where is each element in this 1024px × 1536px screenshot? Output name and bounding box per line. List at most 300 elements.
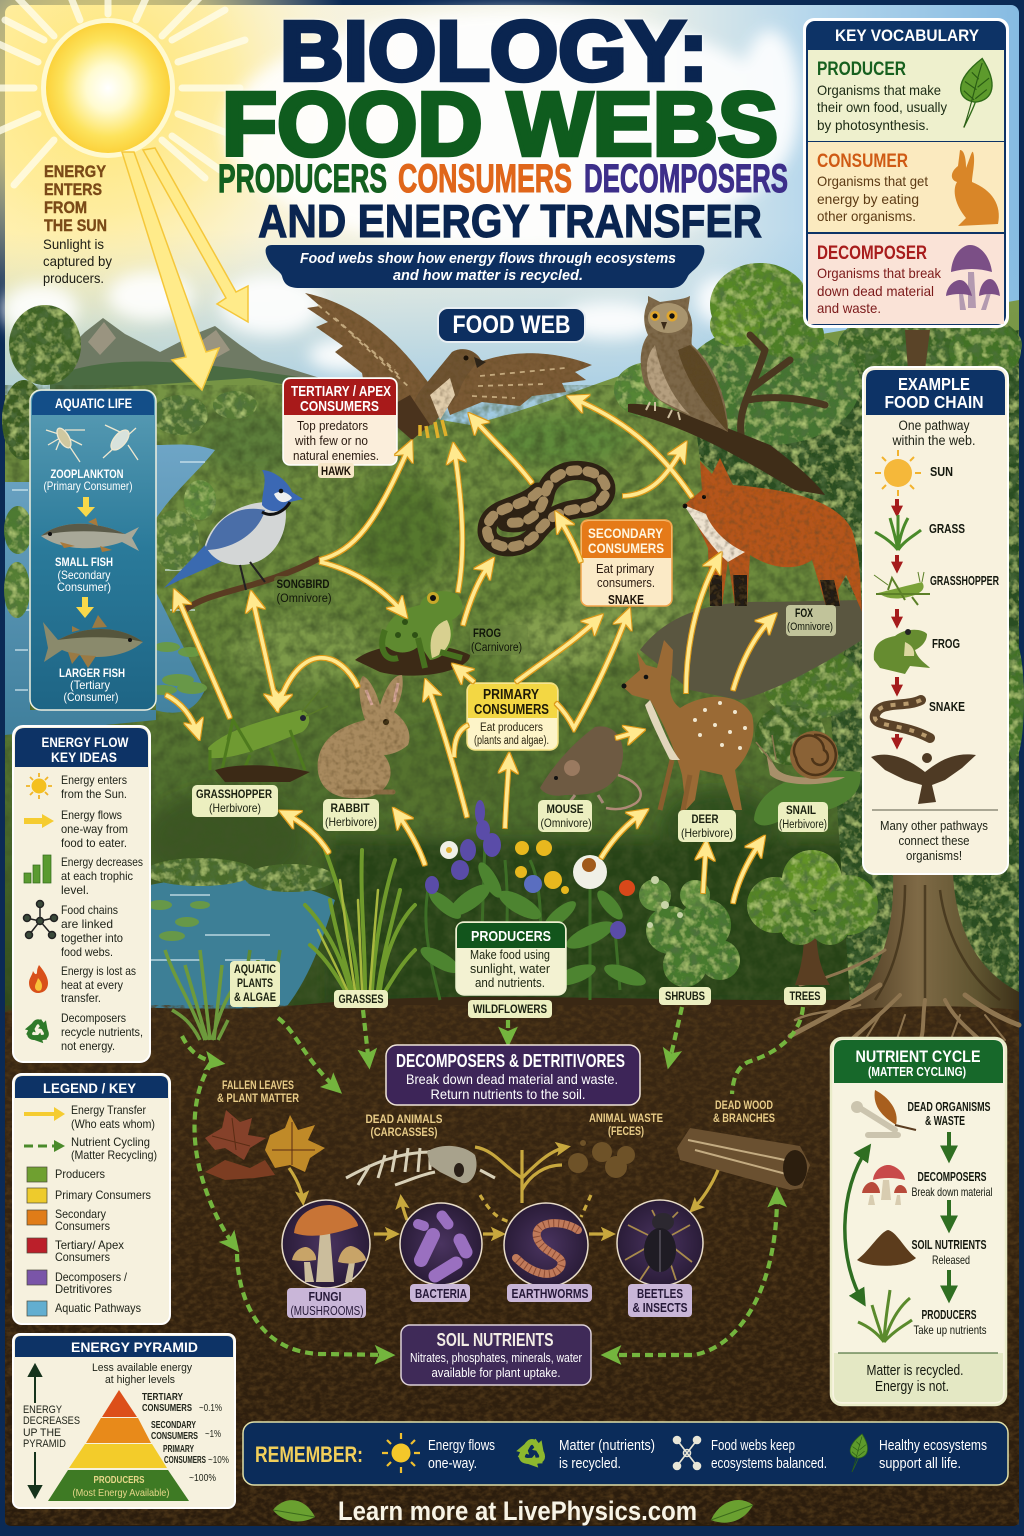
animal: songbird on branch (164, 470, 320, 610)
arrow: fungi to bacteria (374, 1232, 396, 1236)
arrow: fork to earthworm (475, 1147, 567, 1203)
label: aquatic plants and algae: AQUATIC (234, 962, 276, 976)
vocabulary: producer: their own food, usually (817, 99, 947, 115)
arrow: aquatic plants to leaves (278, 1018, 338, 1090)
panel: energy flow key ideas: are linked (61, 917, 113, 931)
subtitle banner: and how matter is recycled. (393, 267, 583, 284)
panel: legend key: Aquatic Pathways (55, 1301, 141, 1315)
label: mouse (538, 800, 592, 832)
pyramid levels: (Most Energy Available) (72, 1487, 170, 1499)
panel: example food chain: FOOD CHAIN (884, 392, 984, 412)
decomposer: fungi (282, 1200, 370, 1288)
icon: leaf (850, 1434, 867, 1472)
label: snail (778, 802, 828, 832)
panel: nutrient cycle (831, 1038, 1006, 1405)
panel: legend key: (Who eats whom) (71, 1117, 155, 1131)
text: healthy ecosystems support all life: support all life. (879, 1455, 961, 1472)
icon: recycle (24, 1020, 52, 1045)
pyramid labels: ~10% (208, 1454, 229, 1466)
labels: decomposition inputs (217, 1078, 775, 1139)
nutrient cycle labels: Take up nutrients (914, 1323, 986, 1337)
label: grasses: GRASSES (338, 992, 384, 1006)
text: matter is recycled: Matter (nutrients) (559, 1437, 655, 1454)
label: aquatic plants and algae: & ALGAE (234, 990, 276, 1004)
arrow: waste dashed to earthworm (581, 1195, 591, 1217)
panel: soil nutrients (401, 1325, 591, 1385)
vocabulary: consumer: energy by eating (817, 191, 919, 207)
icon: dead organisms (851, 1090, 916, 1135)
label: beetles and insects (628, 1284, 692, 1317)
arrow: soil nutrients to producers (947, 1270, 951, 1298)
icon: flame (29, 965, 48, 993)
panel: aquatic life: LARGER FISH (59, 666, 125, 680)
panel: example food chain: organisms! (906, 848, 962, 863)
panel: energy pyramid: DECREASES (23, 1415, 80, 1427)
pyramid labels: PRIMARY (163, 1444, 194, 1455)
arrow: cycle return (845, 1148, 868, 1302)
title: BIOLOGY: (280, 4, 708, 98)
arrow: dead organisms to decomposers (947, 1132, 951, 1158)
decomposer: beetles (617, 1200, 703, 1286)
panel: primary consumers (467, 683, 558, 750)
arrow: snake to hawk (895, 734, 899, 746)
pyramid labels: CONSUMERS (142, 1403, 192, 1414)
panel: legend key: Detritivores (55, 1282, 112, 1296)
arrow: deer to fox (686, 557, 719, 693)
arrow: mouse to secondary (556, 613, 628, 728)
animal: owl on branch and perch tree (628, 296, 825, 495)
arrow: wildflowers to decomposers (506, 1020, 510, 1042)
panel: example food chain: connect these (898, 833, 970, 848)
label: rabbit (323, 799, 379, 831)
panel: tertiary apex consumers: with few or no (294, 433, 368, 448)
arrow: songbird and grasshopper link (252, 596, 277, 707)
nutrient cycle labels (908, 1099, 992, 1337)
text: food webs keep ecosystems balanced (711, 1437, 827, 1472)
footer note (834, 1353, 1003, 1402)
panel: energy flow key ideas: at each trophic (61, 869, 133, 883)
panel: energy flow key ideas: Decomposers (61, 1011, 126, 1025)
panel: secondary consumers: SNAKE (608, 592, 644, 607)
animal: fox (683, 458, 862, 612)
label: aquatic plants and algae (230, 961, 280, 1007)
animal: rabbit (318, 675, 409, 798)
labels: decomposition inputs: (FECES) (608, 1124, 644, 1138)
panel: tertiary apex consumers: natural enemies. (293, 448, 379, 463)
scene: broad foliage colour (145, 405, 860, 1005)
panel: energy flow key ideas: food to eater. (61, 836, 127, 850)
panel: energy pyramid: PYRAMID (23, 1438, 66, 1450)
panel: producers: and nutrients. (475, 976, 545, 990)
panel: decomposers and detritivores: Return nutrients to the soil. (430, 1086, 586, 1102)
panel: primary consumers: PRIMARY (483, 687, 539, 703)
panel: secondary consumers: SECONDARY (588, 525, 664, 541)
panel: remember bar (243, 1422, 1008, 1485)
chain: snake: SNAKE (929, 699, 965, 714)
panel: producers (456, 922, 566, 995)
label: mouse: MOUSE (546, 802, 584, 816)
panel: energy flow key ideas: from the Sun. (61, 787, 127, 801)
labels: decomposition inputs: DEAD WOOD (715, 1098, 773, 1112)
pyramid labels: CONSUMERS (164, 1455, 206, 1466)
panel: primary consumers: Eat producers (480, 722, 543, 734)
arrow: grass to grasshopper (895, 555, 899, 570)
footer note: Matter is recycled. (866, 1363, 964, 1379)
text: healthy ecosystems support all life: Healthy ecosystems (879, 1437, 987, 1454)
icon: decreasing energy bars (24, 855, 51, 883)
panel: aquatic life: AQUATIC LIFE (55, 396, 132, 411)
arrow: fungi side to soil nutrients (237, 1254, 390, 1355)
label: rabbit: (Herbivore) (325, 815, 377, 829)
panel: aquatic life: SMALL FISH (55, 555, 113, 569)
arrow: wildflowers to mouse (601, 812, 644, 858)
chain: sun: SUN (930, 464, 953, 479)
icon: small fish (41, 518, 139, 552)
panel: secondary consumers: consumers. (597, 576, 655, 590)
pyramid labels: ~100% (189, 1472, 216, 1484)
panel: energy flow key ideas: Energy flows (61, 808, 122, 822)
label: trees (784, 987, 826, 1005)
panel: aquatic life (30, 390, 156, 710)
nutrient cycle labels: SOIL NUTRIENTS (912, 1237, 987, 1252)
chain: frog (874, 629, 960, 674)
arrow: short curve to primary box (454, 725, 468, 757)
text block: energy enters from the sun: producers. (43, 270, 104, 286)
panel: legend key: Consumers (55, 1250, 110, 1264)
labels: decomposition inputs: & PLANT MATTER (217, 1091, 299, 1105)
text block: energy enters from the sun: ENERGY (44, 162, 107, 181)
panel: energy flow key ideas: not energy. (61, 1039, 115, 1053)
panel: aquatic life: Consumer) (57, 580, 111, 594)
panel: energy flow key ideas: level. (61, 883, 89, 897)
text: matter is recycled: is recycled. (559, 1455, 621, 1472)
label: beetles and insects: BEETLES (637, 1286, 683, 1301)
panel: example food chain: One pathway (898, 418, 970, 433)
arrow: wildflowers to primary consumers (505, 758, 509, 828)
labels: decomposition inputs: DEAD ANIMALS (366, 1112, 442, 1126)
panel: energy flow key ideas: Energy decreases (61, 855, 143, 869)
label: wildflowers (468, 1000, 552, 1018)
nutrient cycling arrows (182, 1007, 803, 1355)
label: deer: DEER (692, 812, 719, 826)
label: fox: (Omnivore) (787, 621, 833, 633)
icon: dead log (677, 1128, 810, 1190)
pyramid levels: PRODUCERS (94, 1474, 144, 1486)
label: trees: TREES (790, 989, 820, 1003)
panel: nutrient cycle: NUTRIENT CYCLE (856, 1047, 980, 1066)
panel: legend key: Decomposers / (55, 1270, 128, 1284)
arrow: bacteria to carcass (401, 1198, 407, 1220)
decomposer: earthworms (504, 1203, 588, 1287)
arrow: pyramid up (29, 1365, 41, 1403)
panel: energy flow key ideas: one-way from (61, 822, 128, 836)
panel: example food chain: within the web. (892, 433, 976, 448)
panel: energy flow key ideas: heat at every (61, 978, 123, 992)
panel: legend key: (Matter Recycling) (71, 1148, 157, 1162)
animal: mouse (540, 726, 641, 809)
label: grasshopper (192, 785, 278, 817)
animal: hawk (305, 293, 592, 440)
arrow: pyramid down (29, 1452, 41, 1497)
legend: nutrient cycling arrow (24, 1140, 65, 1152)
panel: soil nutrients: available for plant uptake. (432, 1365, 560, 1380)
icon: sun (382, 1433, 420, 1473)
scene: big tree trunk and roots (790, 872, 1019, 1045)
label: fox: FOX (795, 608, 813, 620)
panel: energy pyramid: Less available energy (92, 1362, 192, 1374)
arrow: wildflowers to rabbit side (427, 684, 467, 817)
animal: grasshopper (208, 690, 328, 782)
label: grasses (334, 990, 388, 1008)
scene: soil underground (5, 995, 1019, 1526)
pyramid levels (48, 1390, 189, 1501)
panel: tertiary apex consumers (283, 378, 397, 478)
arrow: songbird to frog (320, 562, 404, 614)
panel: legend key (13, 1074, 170, 1324)
text block: energy enters from the sun: THE SUN (44, 216, 107, 235)
nutrient cycle labels: PRODUCERS (922, 1307, 977, 1322)
arrow: shrubs to deer (703, 845, 706, 893)
arrow: frog to hawk (454, 448, 462, 592)
chain: hawk (871, 753, 976, 804)
arrow: grasses to decomposers (363, 1010, 369, 1064)
panel: energy pyramid: at higher levels (105, 1374, 175, 1386)
panel: primary consumers: (plants and algae). (474, 735, 549, 747)
animal: deer (622, 640, 754, 815)
chain: grass (875, 515, 965, 550)
arrow: secondary consumers to snake (558, 516, 581, 562)
vocabulary: decomposer: down dead material (817, 283, 934, 299)
arrow: frog to snake (895, 677, 899, 693)
pyramid labels: ~0.1% (199, 1402, 222, 1414)
vocabulary: producer: by photosynthesis. (817, 117, 929, 133)
arrow: snake to hawk (472, 417, 532, 483)
label: shrubs (659, 987, 711, 1005)
label: earthworms: EARTHWORMS (512, 1286, 589, 1301)
arrow: frog to snake (463, 562, 491, 625)
arrow: shrubs to decomposers (669, 1007, 682, 1064)
panel: secondary consumers (581, 520, 672, 607)
arrow: zooplankton to small fish (77, 497, 95, 517)
icon: footer leaf left (273, 1500, 315, 1521)
arrow: fox to hawk (572, 398, 692, 497)
panel: legend key: Secondary (55, 1207, 106, 1221)
animal: frog (355, 591, 470, 676)
pyramid labels (142, 1392, 229, 1484)
label: rabbit: RABBIT (330, 801, 370, 815)
panel: energy flow key ideas: Energy enters (61, 773, 127, 787)
text: energy flows one-way: one-way. (428, 1455, 477, 1472)
panel: producers: Make food using (470, 948, 550, 962)
label: grasshopper: GRASSHOPPER (196, 787, 272, 801)
label: songbird: (Omnivore) (276, 593, 332, 605)
nutrient cycle labels: DECOMPOSERS (918, 1169, 987, 1184)
title: FOOD WEBS (222, 75, 778, 175)
panel: decomposers and detritivores (386, 1045, 640, 1105)
vocabulary: decomposer: DECOMPOSER (817, 243, 927, 264)
label: songbird: SONGBIRD (276, 579, 330, 591)
scene: soil texture (5, 1005, 1019, 1525)
animal: snake (487, 470, 606, 547)
legend: energy transfer arrow (24, 1107, 65, 1121)
panel: energy flow key ideas: together into (61, 931, 123, 945)
panel: energy pyramid: ENERGY PYRAMID (71, 1339, 198, 1355)
panel: legend key: Energy Transfer (71, 1103, 146, 1117)
panel: energy flow key ideas: Energy is lost as (61, 964, 136, 978)
nutrient cycle labels: & WASTE (925, 1113, 965, 1128)
pyramid labels: SECONDARY (151, 1420, 196, 1431)
label: earthworms (507, 1284, 592, 1302)
panel: secondary consumers: Eat primary (596, 562, 655, 576)
icon: mushrooms (862, 1165, 907, 1205)
arrow: grasshopper to songbird (176, 594, 230, 718)
label: wildflowers: WILDFLOWERS (473, 1002, 547, 1016)
arrow: down to fungi (195, 1063, 236, 1248)
arrow: decomposers to soil nutrients (947, 1200, 951, 1228)
label: fungi: (MUSHROOMS) (290, 1303, 364, 1318)
panel: legend key: LEGEND / KEY (43, 1081, 136, 1096)
panel: key vocabulary: KEY VOCABULARY (835, 26, 980, 45)
vocabulary: consumer: Organisms that get (817, 173, 928, 189)
panel: tertiary apex consumers: HAWK (321, 464, 351, 478)
panel: tertiary apex consumers: TERTIARY / APEX (291, 383, 391, 400)
panel: nutrient cycle: (MATTER CYCLING) (868, 1065, 966, 1079)
scene: meadow ground (5, 300, 1019, 1030)
scene: sky with sun glow and clouds (0, 0, 1019, 445)
label: deer: (Herbivore) (681, 826, 733, 840)
panel: tertiary apex consumers: CONSUMERS (300, 398, 379, 415)
panel: energy flow key ideas (13, 726, 150, 1062)
arrow: grasses to rabbit (396, 812, 425, 865)
nutrient cycle labels: Break down material (912, 1185, 992, 1199)
icon: fallen leaves (205, 1110, 325, 1180)
sun rays: energy arrows (122, 148, 248, 390)
title (218, 4, 788, 247)
icon: network (674, 1436, 700, 1470)
text block: energy enters from the sun: FROM (44, 198, 87, 217)
text: healthy ecosystems support all life (879, 1437, 987, 1472)
label: shrubs: SHRUBS (665, 989, 705, 1003)
text: matter is recycled (559, 1437, 655, 1472)
panel: energy pyramid (13, 1334, 235, 1508)
panel: energy flow key ideas: KEY IDEAS (51, 750, 117, 765)
label: fungi: FUNGI (308, 1289, 342, 1304)
vocabulary: decomposer (808, 234, 1004, 324)
labels: decomposition inputs: ANIMAL WASTE (589, 1111, 663, 1125)
chain: grasshopper (874, 572, 999, 605)
panel: example food chain (863, 367, 1008, 874)
plants: tree (747, 850, 878, 985)
arrow: rabbit to songbird branch curve (278, 658, 358, 706)
footer: learn more: Learn more at LivePhysics.com (338, 1496, 697, 1526)
chain: grass: GRASS (929, 521, 965, 536)
text: energy flows one-way: Energy flows (428, 1437, 495, 1454)
arrow: dead wood to beetles (692, 1170, 718, 1210)
label: bacteria (410, 1284, 470, 1302)
animal: fox rock ledge (640, 600, 862, 700)
arrow: sun to grass (895, 499, 899, 514)
panel: legend key: Consumers (55, 1219, 110, 1233)
panel: energy flow key ideas: transfer. (61, 991, 101, 1005)
vocabulary: consumer (808, 142, 1004, 232)
title: AND ENERGY TRANSFER (258, 195, 762, 247)
panel: producers: sunlight, water (470, 962, 550, 976)
legend: colour swatches (27, 1167, 47, 1316)
heading: food web: FOOD WEB (452, 311, 570, 339)
label: snail: SNAIL (786, 803, 816, 817)
label: bacteria: BACTERIA (415, 1286, 467, 1301)
vocabulary: consumer: CONSUMER (817, 151, 908, 172)
arrow: small fish to larger fish (76, 597, 94, 618)
label: snail: (Herbivore) (779, 819, 827, 831)
panel: legend key: Nutrient Cycling (71, 1135, 150, 1149)
icon: zooplankton (46, 425, 138, 462)
labels: decomposition inputs: (CARCASSES) (370, 1125, 438, 1139)
scene: forest and tree canopies (2, 263, 1024, 1000)
icon: food chain network (24, 900, 58, 938)
chain: sun (875, 450, 953, 496)
vocabulary: consumer: other organisms. (817, 208, 916, 224)
panel: soil nutrients: SOIL NUTRIENTS (436, 1330, 554, 1350)
arrow: primary consumers to frog (456, 667, 474, 682)
animal: snail (754, 731, 860, 825)
vocabulary: producer: Organisms that make (817, 82, 941, 98)
scene: foliage texture (5, 385, 1019, 1010)
panel: decomposers and detritivores: Break down dead material and waste. (406, 1071, 618, 1087)
text: energy flows one-way (428, 1437, 495, 1472)
pyramid labels: ~1% (205, 1428, 221, 1440)
pyramid labels: TERTIARY (142, 1392, 183, 1403)
panel: aquatic life: (Consumer) (64, 690, 118, 704)
decomposer flow arrows (289, 1147, 718, 1234)
arrow: earthworms to beetles (589, 1232, 612, 1236)
plants: grasses clump (305, 850, 415, 990)
subtitle banner (266, 245, 704, 288)
footer note: Energy is not. (875, 1379, 949, 1395)
text: food webs keep ecosystems balanced: Food webs keep (711, 1437, 795, 1454)
text block: energy enters from the sun: Sunlight is (43, 236, 104, 252)
panel: producers: PRODUCERS (471, 928, 551, 945)
label: beetles and insects: & INSECTS (632, 1300, 688, 1315)
icon: producer grass (858, 1290, 912, 1342)
chain: snake (875, 699, 965, 738)
panel: energy pyramid: UP THE (23, 1427, 61, 1439)
arrow: deer to fox right (733, 617, 773, 690)
arrow: waste to earthworm (522, 1165, 562, 1190)
plants: wildflowers (417, 800, 648, 1000)
label: frog: (Carnivore) (471, 642, 522, 654)
title: CONSUMERS (398, 157, 572, 201)
panel: primary consumers: CONSUMERS (474, 702, 549, 718)
panel: legend key: Tertiary/ Apex (55, 1238, 124, 1252)
icon: footer leaf right (711, 1500, 753, 1523)
icon: sun (26, 773, 52, 799)
vocabulary: producer: PRODUCER (817, 59, 906, 80)
subtitle banner: Food webs show how energy flows through ecosystems (300, 250, 676, 267)
panel: energy flow key ideas: food webs. (61, 945, 113, 959)
panel: remember bar: REMEMBER: (255, 1442, 363, 1467)
label: mouse: (Omnivore) (540, 816, 592, 830)
scene: river and pond (4, 444, 335, 1015)
arrow: carcass dashed to earthworm (480, 1195, 510, 1222)
panel: decomposers and detritivores: DECOMPOSERS & DETRITIVORES (396, 1051, 625, 1071)
arrow: trees to snail (733, 840, 762, 903)
panel: aquatic life: ZOOPLANKTON (50, 467, 124, 481)
scene: mountains (50, 318, 320, 410)
chain: frog: FROG (932, 636, 960, 651)
panel: tertiary apex consumers: Top predators (297, 418, 368, 433)
panel: aquatic life: (Tertiary (70, 678, 110, 692)
